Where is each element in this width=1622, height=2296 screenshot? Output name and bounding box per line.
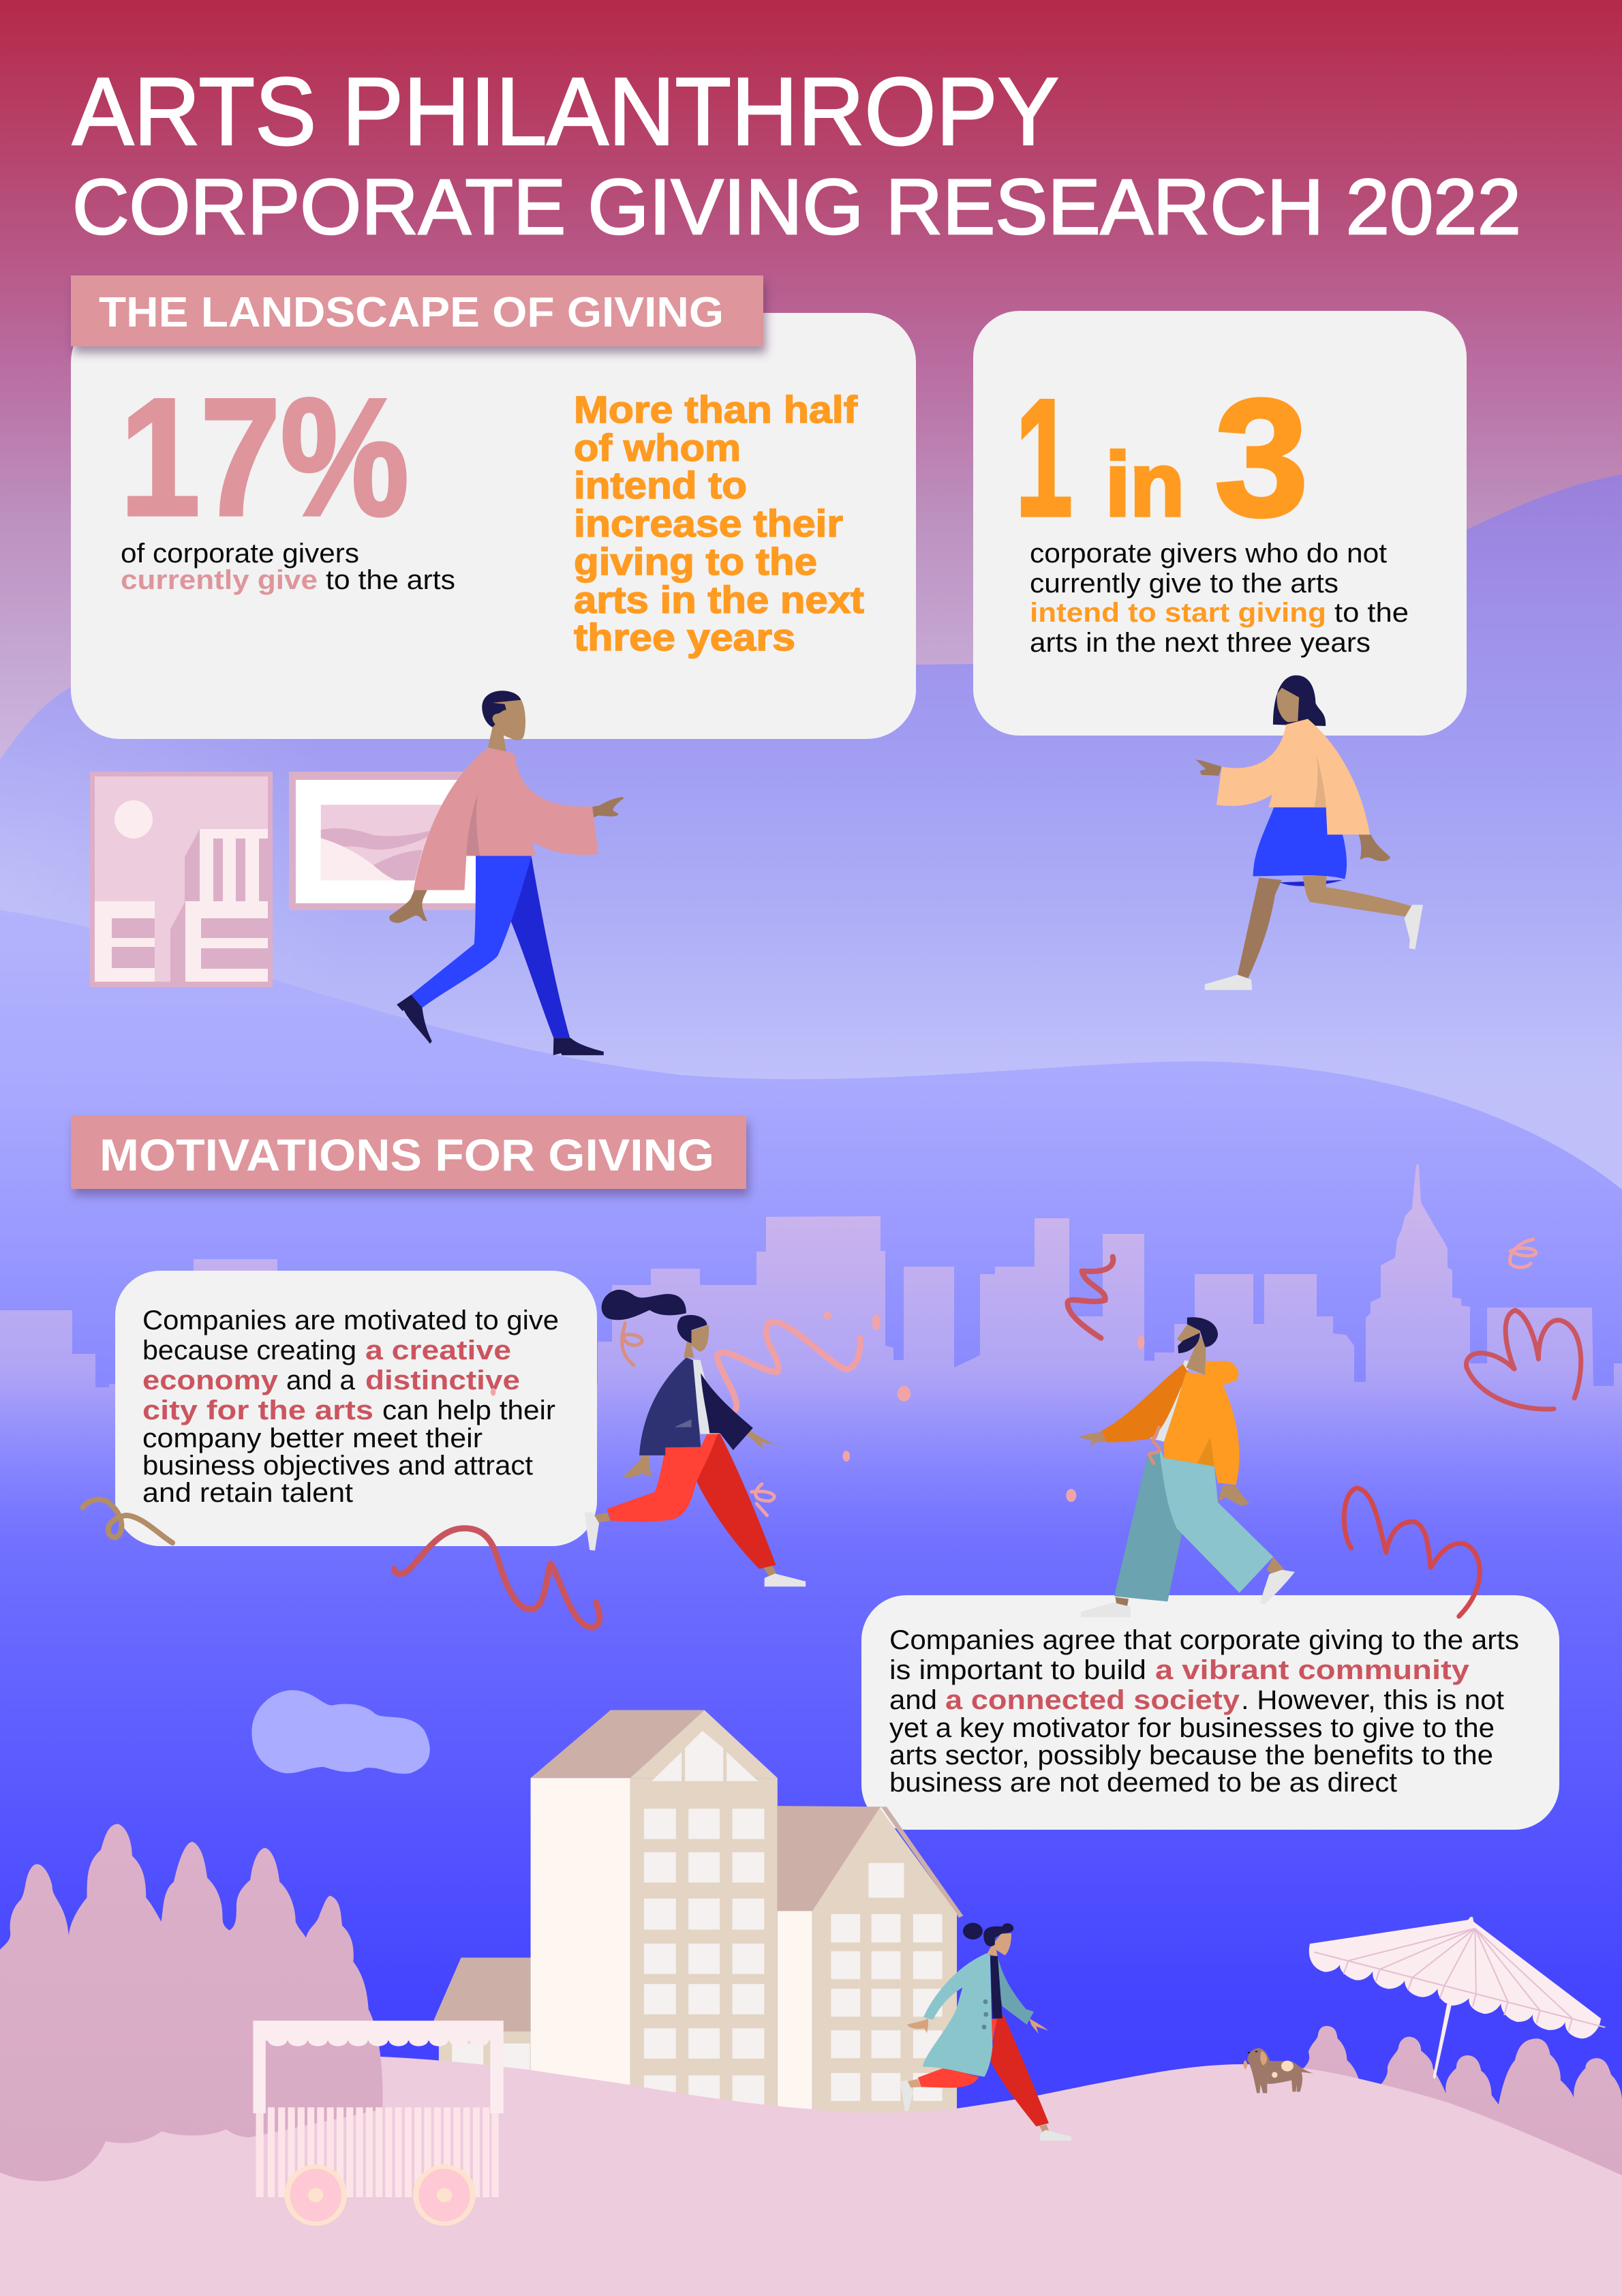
panel: creative economy text: and retain talent [142,1478,353,1508]
text: intend to start giving: intend to start giving [1030,598,1326,628]
panel: vibrant community text: is important to build [889,1655,1146,1685]
panel: creative economy text: business objectives and attract [142,1451,533,1481]
background lower wave [0,910,1622,2296]
red ribbon above lower text panel [1344,1488,1480,1616]
heading: the landscape of giving: THE LANDSCAPE OF GIVING [99,289,724,336]
cloud [251,1690,430,1774]
big number 1 in 3 [1015,364,1309,551]
figure: woman in peach sweater [1195,676,1423,990]
panel: creative economy text: can help their [382,1395,555,1425]
figure: woman in navy jacket and red trousers [585,1290,806,1586]
art frame: city building [90,772,273,987]
text: intend to start giving: arts in the next three years [1030,628,1371,658]
big number 1 in 3: in [1105,434,1184,534]
text: intend to start giving: to the [1334,598,1409,628]
panel: creative economy text [115,1271,597,1546]
small building [433,1958,531,2079]
beach umbrella [1309,1917,1605,2079]
heading: motivations for giving: MOTIVATIONS FOR GIVING [100,1130,714,1180]
ribbons around man in orange jacket [825,1239,1581,1502]
text: more than half: increase their [574,502,843,545]
big number 1 in 3: 1 [1015,364,1073,551]
panel: vibrant community text: and [889,1685,937,1715]
background purple hill [0,474,1622,1227]
text: more than half: intend to [574,464,747,507]
big number 17%: 17% [120,363,409,550]
dog [1243,2048,1314,2093]
trees on left [0,1824,383,2181]
panel: creative economy text: economy [142,1365,279,1395]
figure: woman in teal coat [900,1923,1071,2141]
text: currently give: of corporate givers [121,539,359,569]
figure: man in pink sweater [389,691,624,1055]
panel: creative economy text: and a [286,1365,356,1395]
panel: creative economy text: Companies are motivated to give [142,1305,559,1335]
panel: creative economy text: company better meet their [142,1423,483,1453]
title [72,57,1521,251]
text: currently give: to the arts [326,565,455,595]
panel: creative economy text: city for the arts [142,1395,373,1425]
tall apartment building [531,1710,778,2113]
title: CORPORATE GIVING RESEARCH 2022 [72,164,1521,251]
panel: vibrant community text: a vibrant community [1155,1655,1470,1685]
panel: vibrant community text: a connected society [945,1685,1240,1715]
panel: vibrant community text [861,1595,1559,1830]
text: currently give: currently give [121,565,318,595]
text: more than half: More than half [574,388,857,431]
panel: vibrant community text: Companies agree that corporate giving to the arts [889,1625,1519,1655]
market cart [253,2021,504,2226]
foreground pink hill [0,2055,1622,2296]
panel: vibrant community text: business are not deemed to be as direct [889,1768,1397,1798]
title: ARTS PHILANTHROPY [72,57,1059,165]
city skyline silhouette [0,1164,1622,1568]
panel: 1 in 3 statistic [973,311,1467,736]
panel: creative economy text: distinctive [365,1365,520,1395]
ribbons around woman in navy jacket [82,1312,881,1627]
panel: creative economy text: because creating [142,1335,356,1365]
background sky gradient [0,0,1622,954]
text: more than half: giving to the [574,540,817,583]
heading: motivations for giving [71,1115,749,1196]
panel: landscape statistic 17% [71,313,916,739]
heading: the landscape of giving [71,275,766,353]
panel: vibrant community text: yet a key motivator for businesses to give to the [889,1713,1495,1743]
text: more than half [574,388,864,659]
art frame: landscape painting [289,772,476,910]
panel: vibrant community text: . However, this is not [1241,1685,1504,1715]
text: currently give [121,539,455,595]
panel: creative economy text: a creative [365,1335,511,1365]
figure: man in orange jacket [1078,1317,1295,1617]
text: intend to start giving [1030,539,1409,658]
trees on right [1302,2026,1622,2178]
text: more than half: arts in the next [574,578,864,621]
text: more than half: of whom [574,426,741,469]
text: intend to start giving: corporate givers who do not [1030,539,1387,569]
gabled building [778,1806,963,2115]
panel: vibrant community text: arts sector, possibly because the benefits to the [889,1740,1493,1770]
text: more than half: three years [574,616,795,659]
text: intend to start giving: currently give to the arts [1030,569,1338,599]
big number 1 in 3: 3 [1214,364,1309,551]
